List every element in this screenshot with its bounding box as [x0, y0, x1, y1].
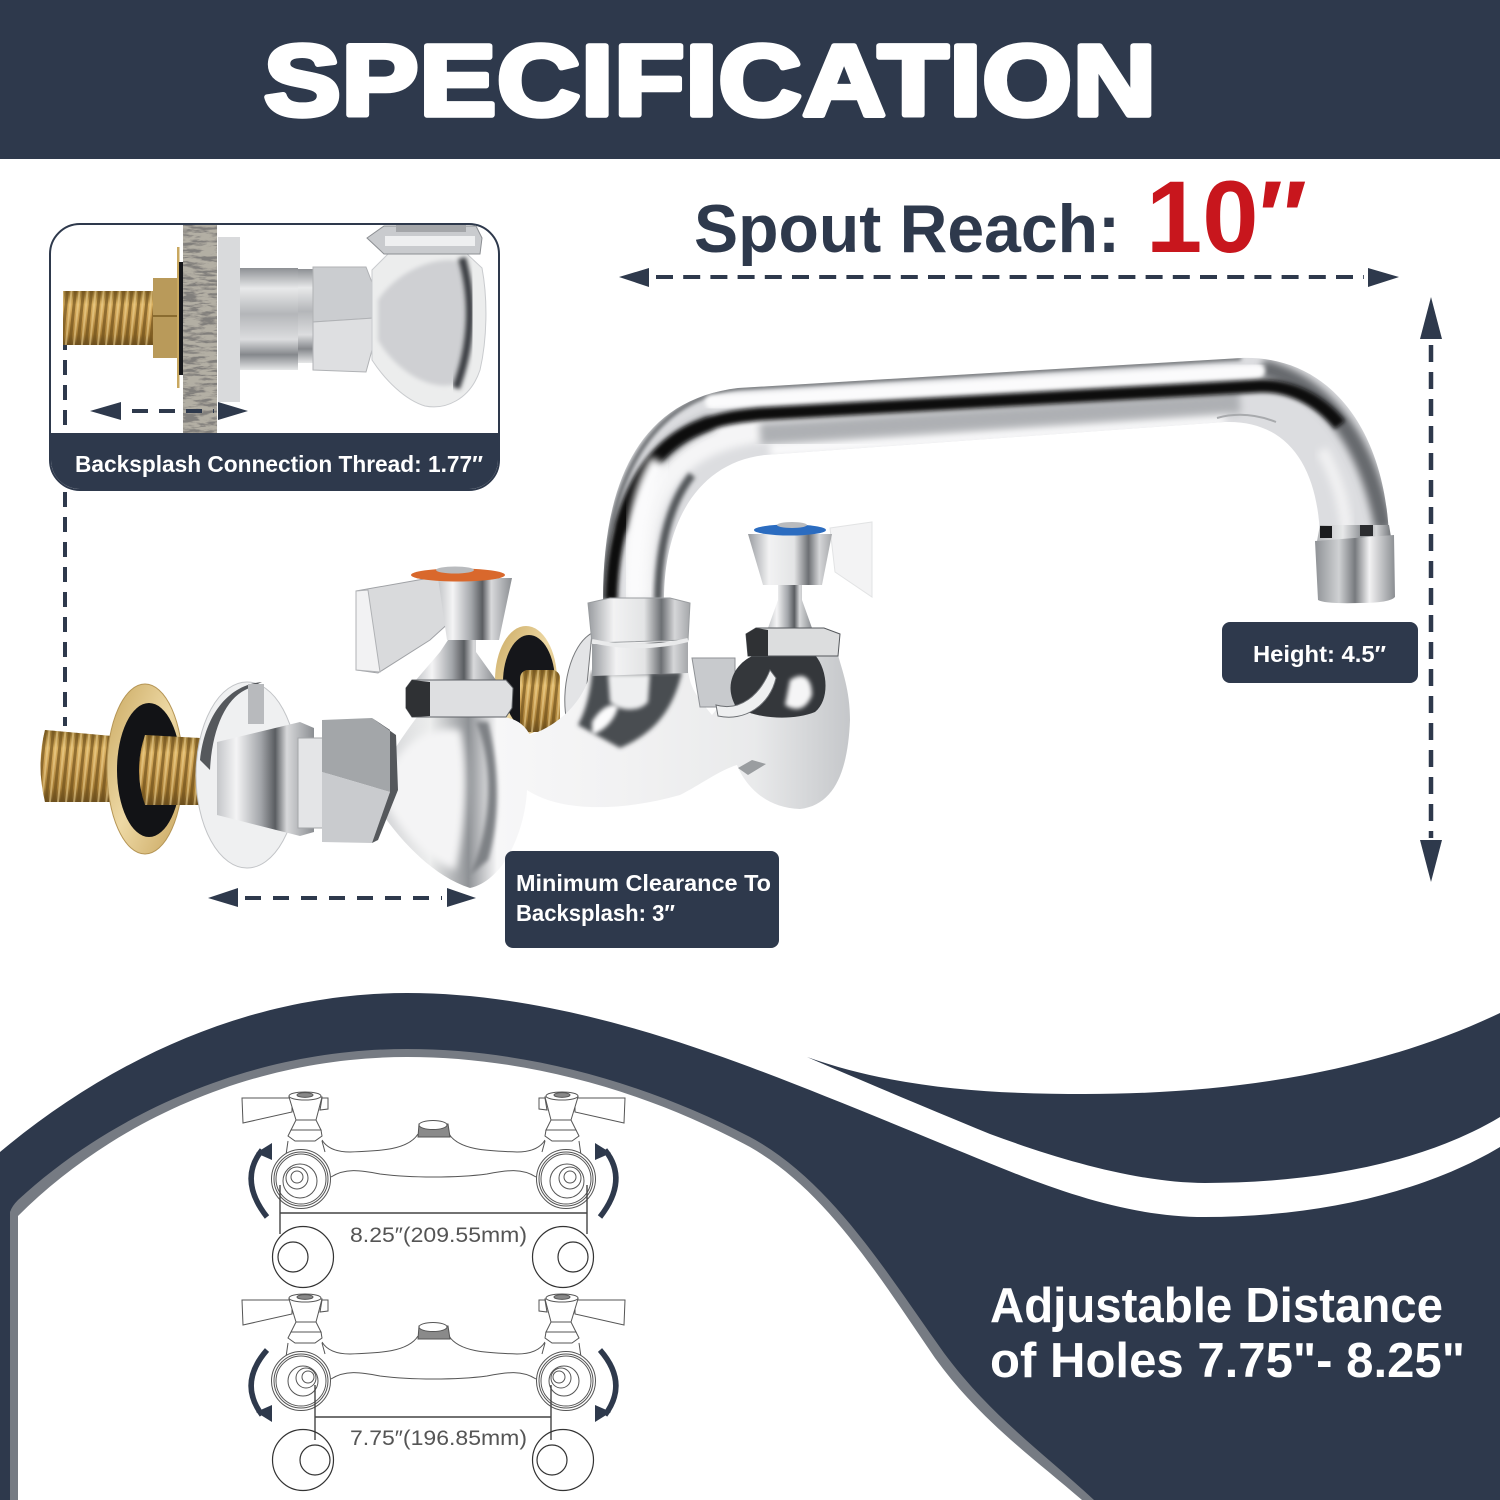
dimension lines	[315, 1385, 551, 1440]
valve outline right	[536, 1294, 625, 1410]
diagram: 8.25 inch hole spacing	[242, 1092, 625, 1288]
rotation arrow right	[595, 1143, 616, 1217]
spout aerator tip	[1315, 525, 1395, 603]
diagram: 7.75 inch hole spacing	[242, 1294, 625, 1490]
spout tube	[603, 358, 1388, 599]
hot valve handle	[438, 578, 512, 640]
text: adjustable distance: Adjustable Distance	[990, 1279, 1443, 1333]
faucet illustration	[40, 340, 1410, 888]
cold valve	[746, 522, 872, 656]
inset: caption bar	[50, 433, 499, 491]
dimension lines	[280, 1185, 587, 1234]
arrow: height dimension	[1420, 297, 1442, 882]
inset: hex nut	[313, 267, 374, 372]
near brass thread	[139, 735, 200, 805]
body outline	[283, 1134, 584, 1198]
faucet body	[373, 655, 850, 888]
heading: spout reach	[694, 160, 1307, 274]
spout base nut	[588, 598, 690, 676]
inset: brass thread	[63, 291, 153, 345]
cold valve nut	[746, 628, 840, 656]
header banner	[0, 0, 1500, 159]
panel: backsplash connection inset	[50, 224, 499, 491]
inset: top nut	[367, 224, 482, 254]
dimension label: 7.75″(196.85mm)	[350, 1427, 527, 1450]
inset: caption text: Backsplash Connection Thread: 1.77″	[75, 451, 483, 477]
cold indicator cap	[754, 522, 826, 536]
glass neck	[298, 738, 326, 828]
arrow: spout reach dimension	[619, 268, 1399, 287]
rotation arrow right	[595, 1350, 616, 1422]
title: SPECIFICATION	[264, 25, 1157, 137]
main hex nut	[322, 718, 398, 843]
valve outline left	[242, 1092, 330, 1208]
hot indicator cap	[411, 566, 505, 582]
body outline	[288, 1336, 579, 1396]
callout: minimum clearance	[505, 851, 779, 948]
cold valve stem	[768, 585, 812, 628]
flange circles	[272, 1430, 594, 1490]
text: adjustable distance: of Holes 7.75"- 8.25"	[990, 1334, 1465, 1388]
inset: chrome flange	[218, 237, 240, 402]
inset: chrome collar	[240, 268, 313, 370]
valve outline left	[242, 1294, 330, 1410]
value: 10 inches: 10″	[1146, 160, 1307, 274]
dimension label: 8.25″(209.55mm)	[350, 1224, 527, 1247]
rotation arrow left	[251, 1350, 272, 1422]
hot valve lever	[356, 574, 452, 673]
dashed guide line: below inset	[63, 492, 67, 726]
center thread	[418, 1120, 450, 1137]
hot valve stem	[416, 640, 496, 680]
inset: dimension arrow	[90, 402, 248, 420]
flange circles	[272, 1226, 594, 1288]
valve outline right	[536, 1092, 625, 1208]
text: adjustable distance	[990, 1279, 1465, 1388]
inset: dashed guide line	[63, 345, 67, 425]
gold washer	[107, 684, 183, 854]
callout: height	[1222, 622, 1418, 683]
far brass thread	[40, 730, 112, 802]
cold valve handle	[748, 534, 832, 585]
back flange and washer	[495, 626, 592, 734]
wall flange	[196, 682, 298, 868]
inset: valve body	[372, 250, 486, 407]
cold valve lever	[830, 522, 872, 597]
inset: stone wall	[183, 225, 217, 433]
heading: spout reach: Spout Reach:	[694, 191, 1120, 267]
body reflections	[380, 655, 826, 875]
chrome collar	[217, 722, 314, 836]
rotation arrow left	[251, 1143, 272, 1217]
callout: minimum clearance: Minimum Clearance To	[516, 870, 771, 896]
inset: brass hex nut	[153, 247, 183, 388]
hot valve nut	[406, 680, 513, 717]
bottom wave background	[0, 993, 1500, 1500]
arrow: clearance dimension	[208, 888, 476, 907]
hot valve	[356, 566, 513, 717]
callout: height: Height: 4.5″	[1253, 641, 1386, 667]
callout: minimum clearance: Backsplash: 3″	[516, 900, 675, 926]
center thread	[418, 1322, 450, 1339]
